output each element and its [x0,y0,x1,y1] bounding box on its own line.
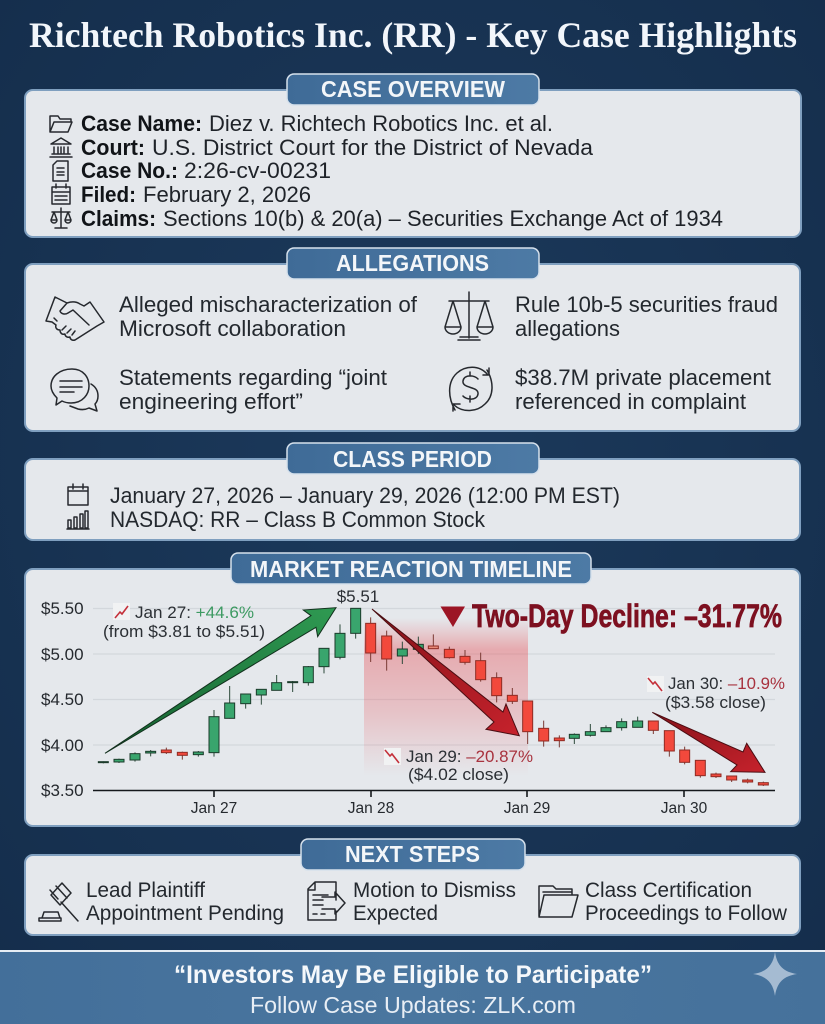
text: allegation 4: $38.7M private placement [515,365,772,390]
text: court: U.S. District Court for the District of Nevada [152,135,594,160]
y axis labels [41,599,84,800]
icon: calendar outline [68,484,88,505]
text: case name: Diez v. Richtech Robotics Inc. et al. [209,111,553,136]
text: motion to dismiss [353,878,516,925]
icon: document [53,161,68,181]
panel: market reaction timeline [25,553,800,826]
icon: folder [50,116,72,132]
icon: bar chart [67,511,89,529]
heading: next steps: NEXT STEPS [345,841,480,867]
candlestick chart [98,608,768,786]
text: motion to dismiss: Expected [353,901,438,925]
panel: case overview [25,74,801,237]
text: claims: Claims: [81,206,156,231]
icon: document with arrow [308,882,345,920]
heading: allegations [287,248,539,279]
panel: class period [25,443,800,540]
icon: scales of justice [445,292,493,340]
y axis labels: $5.50 [41,599,84,618]
heading: case overview: CASE OVERVIEW [321,76,505,102]
text: allegation 4: referenced in complaint [515,389,747,414]
icon: open folders [539,886,578,917]
icon: scales small [51,208,71,228]
text: allegation 2: allegations [515,316,620,341]
x axis with date labels [93,790,775,817]
text: filed: Filed: [81,182,136,207]
callout: Jan 30 drop: Jan 30: –10.9% [668,674,785,693]
y axis labels: $5.00 [41,645,84,664]
text: claims: Sections 10(b) & 20(a) – Securities Exchange Act of 1934 [163,206,723,231]
text: allegation 1: Alleged mischaracterization of [119,292,418,317]
callout: Jan 27 gain: (from $3.81 to $5.51) [103,622,265,641]
text: ticker: NASDAQ: RR – Class B Common Stock [110,507,486,532]
x axis with date labels: Jan 28 [348,800,394,817]
label: peak price: $5.51 [337,587,379,606]
arrow: green rally [105,608,336,753]
decline shaded zone [364,618,528,776]
text: allegation 2 [515,292,778,341]
text: class certification: Class Certification [585,878,752,902]
panel: allegations [25,248,800,431]
text: allegation 3 [119,365,388,414]
text: case name: Case Name: [81,111,202,136]
icon: speech bubbles [51,369,98,411]
x axis with date labels: Jan 29 [504,800,550,817]
footer link line: Follow Case Updates: ZLK.com [250,992,576,1018]
callout: Jan 30 drop [647,674,785,712]
text: allegation 3: Statements regarding “joint [119,365,388,390]
text: lead plaintiff [86,878,284,925]
text: allegation 1 [119,292,418,341]
icon: dollar cycle [450,367,492,411]
text: lead plaintiff: Appointment Pending [86,901,284,925]
icon: sparkle star [753,952,797,996]
callout: Jan 30 drop: ($3.58 close) [665,693,766,712]
text: case number [81,158,331,183]
heading: next steps [301,839,525,870]
heading: class period: CLASS PERIOD [333,446,492,472]
text: class certification: Proceedings to Follow [585,901,787,925]
text: class dates: January 27, 2026 – January 29, 2026 (12:00 PM EST) [110,483,620,508]
text: allegation 1: Microsoft collaboration [119,316,346,341]
callout: Jan 27 gain [103,603,265,641]
footer quote: “Investors May Be Eligible to Participate” [174,961,652,989]
panel: next steps [25,839,800,935]
y axis labels: $4.00 [41,736,84,755]
text: allegation 3: engineering effort” [119,389,303,414]
heading: allegations: ALLEGATIONS [336,250,489,276]
text: lead plaintiff: Lead Plaintiff [86,878,205,902]
x axis with date labels: Jan 30 [661,800,708,817]
text: allegation 2: Rule 10b-5 securities fraud [515,292,778,317]
y axis labels: $4.50 [41,690,84,709]
heading: class period [287,443,539,474]
text: allegation 4 [515,365,772,414]
heading: case overview [287,74,539,105]
callout: Jan 29 drop: Jan 29: –20.87% [406,747,533,766]
footer banner [0,950,825,1024]
text: court: Court: [81,135,145,160]
text: class certification [585,878,787,925]
heading: market reaction timeline: MARKET REACTION TIMELINE [250,556,572,582]
text: case number: 2:26-cv-00231 [184,158,331,183]
arrow: red drop to Jan 30 [652,712,765,772]
text: motion to dismiss: Motion to Dismiss [353,878,516,902]
text: filed: February 2, 2026 [143,182,311,207]
y axis labels: $3.50 [41,781,84,800]
icon: handshake [46,297,104,340]
callout: Jan 27 gain: Jan 27: +44.6% [135,603,254,622]
callout: Jan 29 drop [384,747,533,784]
text: case number: Case No.: [81,158,178,183]
icon: calendar [52,184,70,204]
icon: courthouse [50,138,72,157]
arrow: red drop to Jan 29 [372,609,519,736]
icon: gavel [39,883,78,921]
callout: Jan 29 drop: ($4.02 close) [408,765,509,784]
title: Richtech Robotics Inc. (RR) - Key Case Highlights [29,15,797,55]
x axis with date labels: Jan 27 [191,800,237,817]
